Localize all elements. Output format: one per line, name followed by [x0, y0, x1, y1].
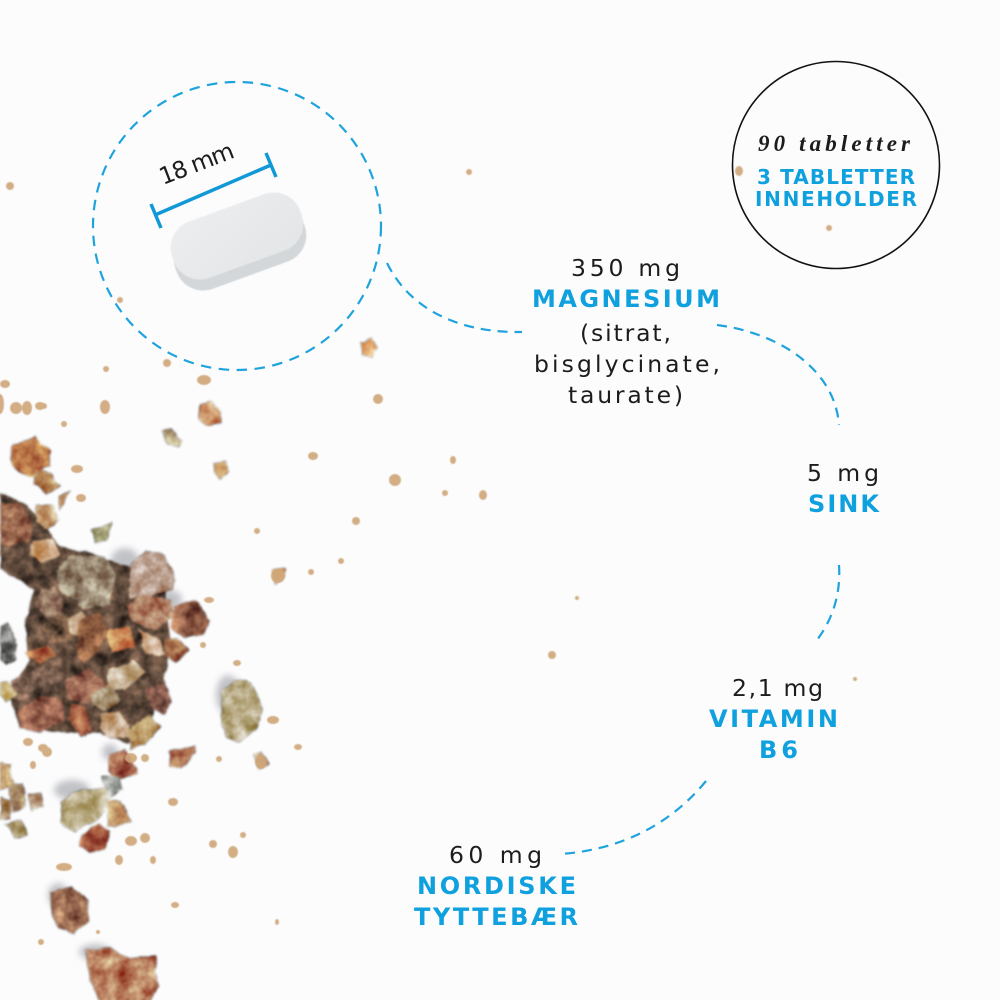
ingredient: vitamin B6: [709, 674, 838, 764]
dashed circle around tablet: [93, 82, 381, 370]
ingredient: lingonberry: NORDISKE: [417, 872, 576, 900]
ingredient: zinc: 5 mg: [807, 459, 879, 487]
connector: magnesium to zinc: [717, 325, 839, 425]
ingredient: magnesium: [532, 254, 720, 409]
badge: tablet count: 90 tabletter: [758, 131, 911, 156]
ingredient: magnesium: bisglycinate,: [534, 350, 720, 378]
badge: tablet count: 3 TABLETTER: [757, 165, 915, 189]
ingredient: zinc: [807, 459, 880, 518]
ingredient: vitamin B6: 2,1 mg: [732, 674, 823, 702]
small specks: [0, 166, 857, 945]
label: 18 mm: 18 mm: [155, 137, 238, 191]
connector: zinc to B6: [817, 565, 839, 640]
ingredient: magnesium: (sitrat,: [580, 319, 671, 347]
connector: tablet to magnesium: [387, 263, 522, 332]
ingredient: zinc: SINK: [808, 490, 880, 518]
larger individual stones: [220, 680, 263, 742]
ingredient: magnesium: 350 mg: [571, 254, 680, 282]
ingredient: lingonberry: 60 mg: [449, 841, 542, 869]
ingredient: vitamin B6: B6: [759, 736, 798, 764]
gravel pile and scattered stones: [0, 166, 857, 1000]
badge: tablet count: INNEHOLDER: [755, 187, 917, 211]
ingredient: lingonberry: [414, 841, 578, 931]
connector: B6 to lingonberry: [560, 781, 706, 854]
rock shadows: [48, 548, 240, 960]
main pile: [0, 338, 378, 1000]
badge: tablet count: [732, 62, 940, 268]
ingredient: vitamin B6: VITAMIN: [709, 705, 838, 733]
ingredient: magnesium: MAGNESIUM: [532, 285, 720, 313]
size dimension bar: [151, 153, 276, 228]
tablet: [163, 185, 314, 298]
ingredient: lingonberry: TYTTEBÆR: [414, 903, 578, 931]
ingredient: magnesium: taurate): [568, 381, 683, 409]
